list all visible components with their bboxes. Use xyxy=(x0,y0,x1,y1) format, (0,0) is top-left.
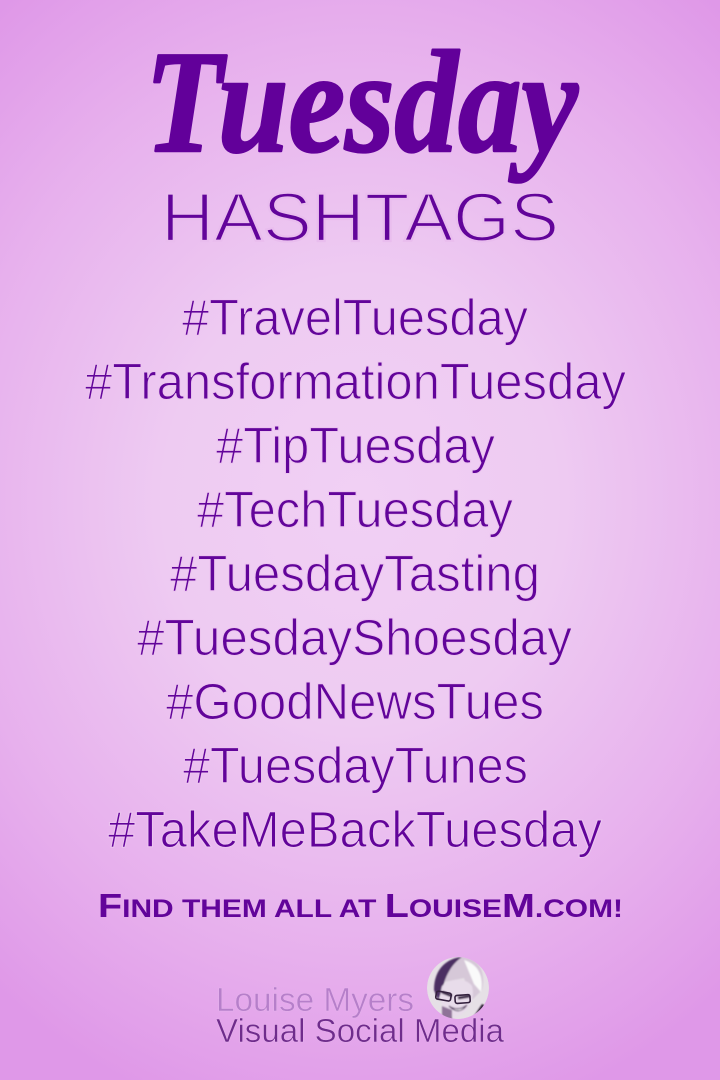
call to action: FIND THEM ALL AT LOUISE M.COM! xyxy=(98,887,623,924)
logo tagline: Visual Social Media: Visual Social Media xyxy=(216,1012,505,1049)
hashtag: TuesdayTasting: #TuesdayTasting xyxy=(170,545,540,602)
hashtag: TuesdayShoesday: #TuesdayShoesday xyxy=(137,609,572,666)
hashtag: TravelTuesday: #TravelTuesday xyxy=(182,289,528,346)
hashtag: TechTuesday: #TechTuesday xyxy=(197,481,513,538)
hashtag list xyxy=(85,289,626,858)
title: Tuesday: Tuesday xyxy=(145,21,579,183)
subtitle: HASHTAGS: HASHTAGS xyxy=(161,179,559,256)
hashtag: TakeMeBackTuesday: #TakeMeBackTuesday xyxy=(108,801,602,858)
logo: Louise Myers Visual Social Media xyxy=(216,957,505,1049)
hashtag: TuesdayTunes: #TuesdayTunes xyxy=(183,737,528,794)
icon: portrait photo xyxy=(427,957,489,1019)
hashtag: GoodNewsTues: #GoodNewsTues xyxy=(166,673,544,730)
logo name: Louise Myers: Louise Myers xyxy=(216,981,414,1018)
hashtag: TransformationTuesday: #TransformationTuesday xyxy=(85,353,626,410)
hashtag: TipTuesday: #TipTuesday xyxy=(216,417,495,474)
